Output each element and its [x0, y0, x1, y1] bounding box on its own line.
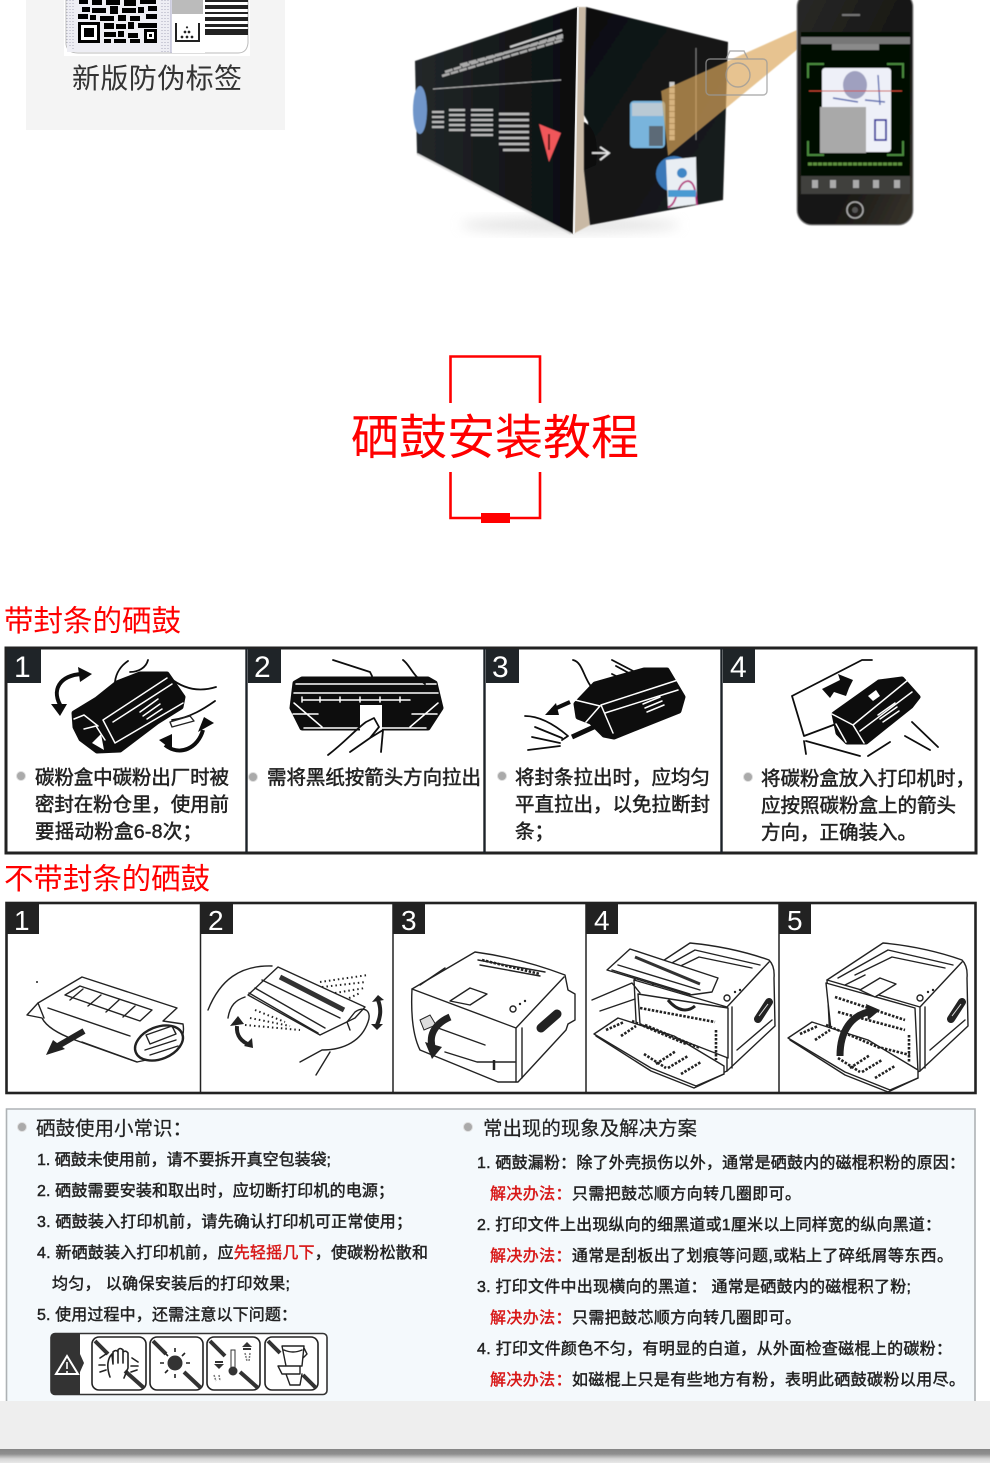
panel: steps without seal: [6, 903, 976, 1093]
shadow: [460, 217, 680, 233]
step 3 text: 平直拉出，以免拉断封: [515, 794, 710, 816]
step 3 text: 将封条拉出时，应均匀: [515, 767, 710, 789]
illustration: rocking the drum: [208, 966, 384, 1075]
solutions list: 解决办法：如磁棍上只是有些地方有粉，表明此硒鼓碳粉以用尽。: [490, 1371, 965, 1389]
number badge 3: 3: [492, 651, 509, 684]
number badge 2: [248, 649, 281, 684]
step 4 text: [761, 768, 975, 844]
number badge 2: [201, 904, 233, 936]
step 4 text: 方向，正确装入。: [761, 822, 917, 844]
tips list: [37, 1151, 428, 1324]
bullet: [248, 772, 258, 782]
number badge 2: 2: [254, 651, 271, 684]
illustration: HP toner box scanned by phone: [413, 0, 913, 234]
step 1 text: 要摇动粉盒6-8次；: [35, 821, 202, 843]
step 1 text: 碳粉盒中碳粉出厂时被: [35, 767, 229, 789]
illustration: inserting cartridge into printer: [792, 660, 938, 756]
number badge 3: [393, 904, 425, 936]
tips list: 均匀， 以确保安装后的打印效果;: [52, 1275, 290, 1293]
bullet: [16, 772, 26, 780]
step 2: [248, 649, 481, 789]
tips list: 3. 硒鼓装入打印机前，请先确认打印机可正常使用；: [37, 1213, 412, 1231]
box right face: [584, 7, 728, 225]
solutions list: 4. 打印文件颜色不匀，有明显的白道，从外面检查磁棍上的碳粉：: [477, 1340, 952, 1358]
tips list: 2. 硒鼓需要安装和取出时，应切断打印机的电源；: [37, 1181, 394, 1200]
solutions list: 解决办法：只需把鼓芯顺方向转几圈即可。: [490, 1309, 801, 1327]
illustration: removing cartridge from bag: [27, 977, 188, 1067]
number badge 1: [7, 904, 39, 936]
step 1 text: 密封在粉仓里，使用前: [35, 794, 229, 816]
step 3 text: [515, 767, 710, 843]
footer band: [0, 1401, 990, 1463]
frame bottom: [450, 472, 540, 523]
phone: [797, 0, 913, 225]
step 2: [201, 904, 384, 1075]
box corner: [573, 7, 592, 234]
tips list: 5. 使用过程中，还需注意以下问题：: [37, 1305, 297, 1324]
number badge 3: 3: [401, 905, 417, 936]
step 3: [486, 649, 710, 843]
icon: basin: [176, 23, 199, 41]
number badge 4: [586, 904, 618, 936]
icon: camera outline: [706, 51, 767, 95]
block: common problems and solutions: [464, 1118, 965, 1389]
icon: temperature and humidity: [207, 1337, 260, 1390]
illustration: shaking the cartridge: [51, 660, 216, 751]
heading: cartridge with seal: 带封条的硒鼓: [4, 605, 181, 638]
number badge 4: 4: [594, 905, 610, 936]
bullet: [498, 772, 506, 780]
illustration: closing the printer door: [788, 943, 968, 1092]
scan card: [822, 68, 891, 152]
panel: steps with seal: [6, 648, 976, 853]
bullet: [18, 1122, 26, 1132]
heading: cartridge without seal: 不带封条的硒鼓: [4, 863, 210, 896]
step 3 text: 条；: [515, 821, 554, 843]
step 4 text: 应按照碳粉盒上的箭头: [761, 795, 956, 817]
number badge 4: [723, 649, 755, 684]
box left face: [413, 7, 578, 234]
solutions heading: 常出现的现象及解决方案: [483, 1118, 697, 1140]
title: 硒鼓安装教程: [351, 412, 639, 465]
icon: do not disassemble: [265, 1337, 318, 1390]
number badge 4: 4: [730, 651, 747, 684]
qr code: [78, 0, 157, 43]
number badge 3: [486, 649, 519, 684]
number badge 2: 2: [208, 905, 224, 936]
panel: anti-counterfeit label: [26, 0, 285, 130]
caption: new anti-counterfeit label: 新版防伪标签: [72, 63, 242, 94]
bullet: [464, 1122, 472, 1132]
solutions list: 解决办法：通常是刮板出了划痕等问题,或粘上了碎纸屑等东西。: [490, 1247, 953, 1265]
step 5: [779, 904, 968, 1092]
step 4: [586, 904, 775, 1088]
icon: avoid sunlight: [150, 1337, 203, 1390]
illustration: inserting cartridge into open printer: [592, 943, 775, 1088]
step 1: [7, 904, 188, 1067]
camera beam: [661, 30, 799, 156]
solutions list: 3. 打印文件中出现横向的黑道： 通常是硒鼓内的磁棍积了粉;: [477, 1278, 911, 1296]
frame top: [450, 356, 540, 403]
illustration: pulling black paper: [292, 660, 441, 755]
solutions list: 解决办法：只需把鼓芯顺方向转几圈即可。: [490, 1185, 801, 1203]
tips heading: 硒鼓使用小常识：: [36, 1118, 192, 1140]
solutions list: [477, 1154, 965, 1389]
illustration: opening the printer door: [412, 952, 575, 1082]
icon: do not touch: [92, 1337, 146, 1390]
step 1 text: [35, 767, 229, 843]
step 4 text: 将碳粉盒放入打印机时，: [761, 768, 975, 790]
panel: usage tips and troubleshooting: [6, 1109, 975, 1401]
number badge 1: 1: [14, 905, 30, 936]
number badge 1: [7, 649, 41, 684]
step 4: [723, 649, 975, 844]
number badge 1: 1: [14, 651, 31, 684]
warning icon strip: [51, 1334, 327, 1394]
step 3: [393, 904, 575, 1082]
bullet: [744, 772, 752, 782]
tips list: 4. 新硒鼓装入打印机前，应先轻摇几下，使碳粉松散和: [37, 1243, 428, 1262]
title frame and heading: [351, 356, 639, 523]
number badge 5: 5: [787, 905, 803, 936]
solutions list: 1. 硒鼓漏粉：除了外壳损伤以外，通常是硒鼓内的磁棍积粉的原因：: [477, 1154, 965, 1172]
step 2 text: 需将黑纸按箭头方向拉出: [267, 767, 481, 789]
barcode stripes: [205, 0, 248, 35]
block: cartridge usage tips: [18, 1118, 428, 1394]
label sticker: [64, 0, 250, 56]
number badge 5: [779, 904, 811, 936]
solutions list: 2. 打印文件上出现纵向的细黑道或1厘米以上同样宽的纵向黑道：: [477, 1216, 941, 1234]
step 1: [7, 649, 229, 843]
icon: warning triangle: [56, 1356, 78, 1374]
tips list: 1. 硒鼓未使用前，请不要拆开真空包装袋;: [37, 1151, 331, 1169]
illustration: pulling out the seal: [525, 660, 683, 750]
